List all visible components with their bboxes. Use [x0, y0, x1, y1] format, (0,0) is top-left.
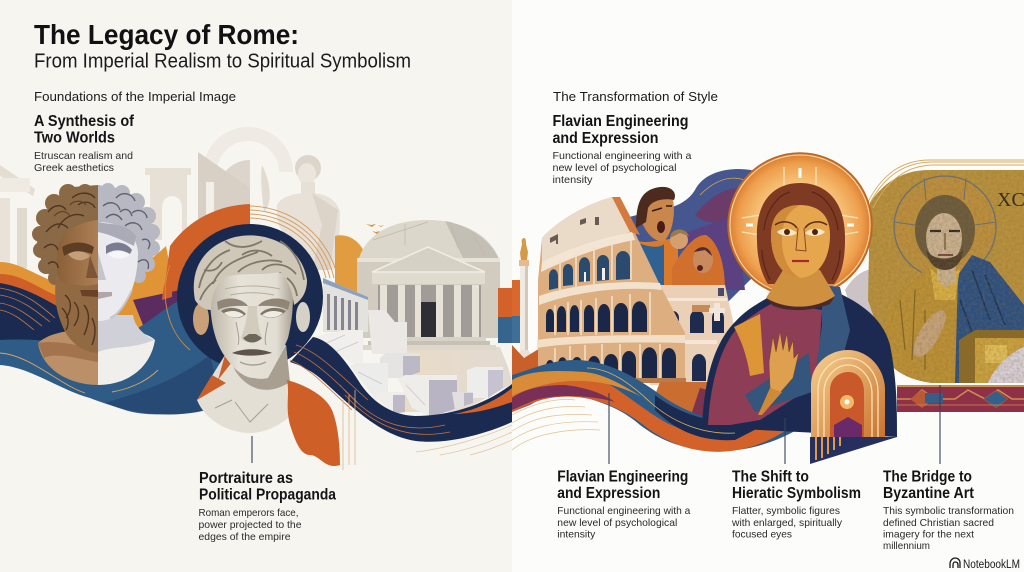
halo: orange and gold arcs, navy disc — [162, 205, 338, 370]
text block: flavian engineering bottom: and Expression — [557, 485, 660, 502]
column monument — [512, 238, 534, 357]
bronze hair — [37, 185, 98, 274]
decorative mosaic band — [897, 385, 1024, 412]
block G — [452, 392, 473, 410]
background head — [670, 231, 688, 249]
section heading: transformation: The Transformation of Style — [553, 89, 718, 104]
body — [538, 197, 685, 382]
text block: the bridge to byzantine art: Byzantine Art — [883, 485, 974, 502]
head — [915, 195, 975, 265]
text block: a synthesis of two worlds — [34, 113, 135, 174]
text block: flavian engineering top — [552, 113, 692, 186]
text block: portraiture as political propaganda: Political Propaganda — [199, 486, 336, 504]
chest — [930, 268, 960, 300]
bust: Augustus portrait — [193, 235, 310, 433]
title: The Legacy of Rome: — [34, 19, 299, 50]
hair behind face — [757, 183, 845, 284]
ghost architecture: background ruins and statue — [0, 134, 340, 270]
text block: the bridge to byzantine art: This symbolic transformation — [883, 505, 1014, 517]
left ribbon: amber, orange, navy and blue waves — [0, 204, 250, 415]
text block: the shift to hieratic symbolism: Flatter, symbolic figures — [732, 505, 840, 517]
halo of Christ icon — [728, 153, 872, 297]
block D — [350, 363, 388, 400]
block E — [398, 375, 457, 416]
man's head — [638, 194, 674, 241]
wide block — [313, 330, 363, 363]
neck and collar — [766, 270, 835, 307]
hair — [194, 235, 307, 310]
right wave background behind figures — [622, 169, 770, 310]
hand — [914, 311, 946, 357]
text block: portraiture as political propaganda: Roman emperors face, — [198, 507, 298, 519]
text block: a synthesis of two worlds: Two Worlds — [34, 130, 115, 147]
text block: portraiture as political propaganda: power projected to the — [198, 519, 302, 531]
text block: flavian engineering top: Flavian Engineering — [552, 113, 688, 130]
gold robe — [894, 266, 958, 383]
text block: flavian engineering bottom — [557, 469, 690, 540]
forehead lines — [225, 286, 280, 295]
arches tier 3 — [546, 301, 647, 332]
XC letters: XC — [997, 189, 1024, 211]
text block: the bridge to byzantine art — [883, 469, 1014, 552]
raised hand — [769, 331, 799, 393]
face — [210, 267, 293, 378]
text block: the shift to hieratic symbolism — [731, 469, 861, 540]
text block: the bridge to byzantine art: millennium — [883, 540, 930, 552]
central navy ribbon — [290, 337, 512, 470]
arches tier 2 — [549, 251, 630, 290]
orange drape on Augustus — [287, 380, 340, 466]
text block: flavian engineering top: and Expression — [552, 130, 658, 147]
arches tier 4 — [546, 347, 676, 378]
lower right ribbon: blue, orange and plum waves — [512, 360, 812, 452]
left lower ribbon start on right panel — [512, 345, 545, 400]
text block: flavian engineering bottom: Functional engineering with a — [557, 505, 690, 517]
book — [959, 330, 1024, 383]
text block: flavian engineering bottom: new level of psychological — [557, 517, 677, 529]
text block: flavian engineering top: new level of psychological — [552, 162, 676, 174]
leader lines — [252, 385, 940, 464]
sand ground behind blocks — [405, 347, 512, 412]
text block: flavian engineering top: Functional engineering with a — [552, 150, 692, 162]
bust: half Etruscan half Greek head — [32, 183, 160, 385]
text block: the bridge to byzantine art: defined Christian sacred — [883, 517, 994, 529]
subtitle: From Imperial Realism to Spiritual Symbolism — [34, 50, 411, 72]
robe — [702, 290, 897, 437]
marble blocks — [313, 310, 503, 418]
stepped block — [368, 310, 407, 354]
nose — [241, 306, 262, 342]
text block: portraiture as political propaganda: edges of the empire — [198, 531, 291, 543]
text block: the shift to hieratic symbolism: with enlarged, spiritually — [731, 517, 843, 529]
glowing archway — [810, 350, 897, 464]
white hair — [98, 185, 155, 285]
block H — [467, 367, 503, 398]
mouth — [232, 349, 272, 356]
statue — [277, 155, 340, 270]
colonnade building — [323, 278, 368, 332]
text block: portraiture as political propaganda: Portraiture as — [199, 470, 293, 487]
neck and chest — [197, 345, 293, 433]
man's garments — [635, 239, 678, 290]
section heading: foundations: Foundations of the Imperial Image — [34, 89, 236, 104]
gold arcs framing the mosaic — [866, 160, 1024, 208]
figures with expressions — [635, 187, 725, 290]
text block: a synthesis of two worlds: A Synthesis of — [34, 113, 135, 130]
text block: the bridge to byzantine art: imagery for the next — [883, 528, 974, 540]
block C — [380, 353, 420, 378]
block F — [375, 392, 405, 412]
Christ icon: figure — [702, 183, 897, 437]
text block: flavian engineering bottom: intensity — [557, 528, 596, 540]
text block: flavian engineering top: intensity — [552, 174, 593, 186]
brow ridges and eye sockets — [217, 299, 248, 310]
pilasters — [555, 240, 660, 378]
colosseum — [537, 197, 735, 385]
text block: the shift to hieratic symbolism: The Shift to — [732, 469, 809, 486]
text block: flavian engineering bottom: Flavian Engineering — [557, 469, 688, 486]
amber blob behind temple — [335, 235, 368, 300]
pantheon temple — [357, 220, 512, 350]
text block: portraiture as political propaganda — [198, 470, 336, 543]
text block: a synthesis of two worlds: Etruscan realism and — [34, 150, 133, 162]
annex building — [650, 285, 735, 385]
ears — [193, 303, 209, 335]
birds — [366, 224, 384, 234]
text block: a synthesis of two worlds: Greek aesthetics — [34, 162, 114, 174]
text block: the shift to hieratic symbolism: Hieratic Symbolism — [732, 485, 861, 502]
blue mantle — [955, 255, 1024, 383]
text block: the bridge to byzantine art: The Bridge to — [883, 469, 972, 486]
woman in hood — [672, 235, 725, 290]
byzantine mosaic panel — [845, 160, 1024, 390]
text block: the shift to hieratic symbolism: focused eyes — [732, 528, 792, 540]
face — [771, 205, 830, 278]
